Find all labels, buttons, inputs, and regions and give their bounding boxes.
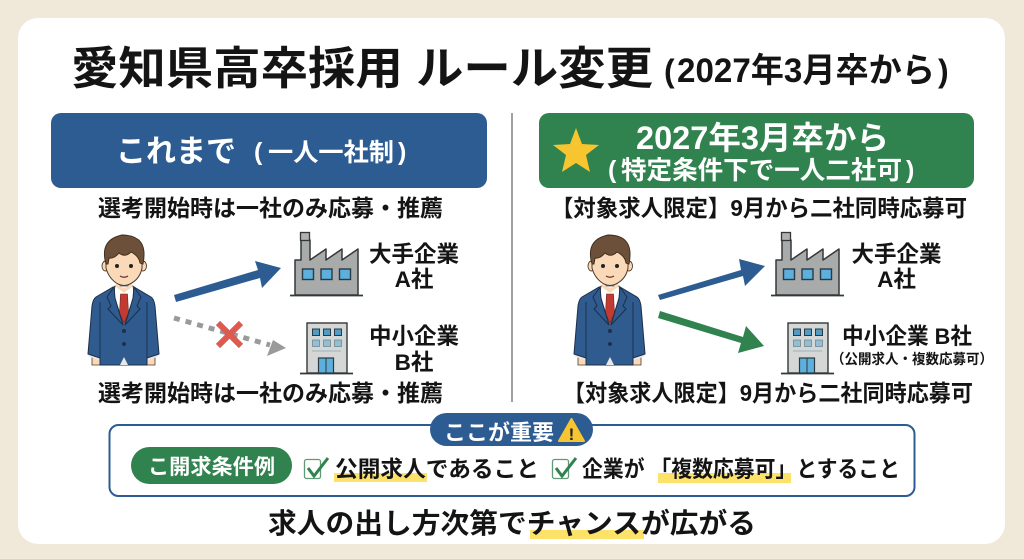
panel: left header: これまで	[116, 134, 236, 169]
icon: warning: !	[569, 425, 574, 444]
label: company B left: 中小企業	[369, 324, 459, 349]
title: 愛知県高卒採用 ルール変更	[71, 43, 653, 94]
icon: building right	[781, 323, 834, 374]
panel: conditions box	[110, 413, 914, 496]
badge: example conditions	[131, 447, 292, 484]
label: company A right: A社	[877, 267, 916, 292]
panel: left header: (	[254, 138, 263, 166]
badge: example conditions: こ開求条件例	[148, 456, 275, 479]
label: company B right: 中小企業 B社	[842, 324, 972, 349]
panel: right header	[539, 113, 974, 188]
panel: right header: 2027年3月卒から	[636, 120, 889, 156]
label: company B right	[831, 324, 993, 367]
left subheading: 選考開始時は一社のみ応募・推薦	[98, 195, 443, 221]
label: company B right: （公開求人・複数応募可）	[831, 351, 993, 367]
label: company A right	[851, 242, 942, 292]
panel: right header: )	[906, 156, 914, 184]
icon: check 1	[304, 458, 328, 478]
label: company B left: B社	[395, 350, 434, 375]
icon: building left	[300, 323, 353, 374]
arrow: dotted grey to company B	[174, 318, 286, 356]
icon: student left	[88, 235, 159, 365]
arrow: blue to company A	[658, 259, 765, 300]
label: company A left	[369, 242, 459, 292]
divider	[511, 113, 513, 402]
label: company B left	[369, 324, 459, 375]
title: 2027年3月卒から	[677, 52, 935, 90]
icon: factory left	[290, 232, 363, 296]
badge: important: ここが重要	[444, 420, 554, 445]
panel: right header: 特定条件下で一人二社可	[621, 157, 902, 185]
icon: warning	[559, 419, 584, 444]
arrow: green to company B	[658, 311, 764, 353]
panel: right header: (	[608, 156, 617, 184]
label: company A right: 大手企業	[851, 242, 942, 267]
condition 1: 公開求人であること	[335, 457, 539, 482]
title: )	[938, 53, 949, 89]
footer message: 求人の出し方次第でチャンスが広がる	[268, 507, 756, 539]
title: (	[664, 53, 675, 89]
icon: student right	[574, 235, 645, 365]
icon: factory right	[771, 232, 844, 296]
arrow: to company A	[174, 261, 281, 302]
label: company A left: A社	[395, 267, 434, 292]
panel: left header	[51, 113, 487, 188]
label: company A left: 大手企業	[369, 242, 459, 267]
icon: check 2	[552, 458, 576, 478]
badge: important	[430, 413, 593, 446]
icon: star	[553, 128, 599, 172]
title	[71, 43, 949, 94]
panel: left header: )	[398, 138, 406, 166]
icon: red cross	[218, 323, 241, 346]
right caption: 【対象求人限定】9月から二社同時応募可	[563, 380, 973, 406]
right subheading: 【対象求人限定】9月から二社同時応募可	[551, 195, 967, 221]
panel: left header: 一人一社制	[268, 139, 394, 167]
left caption: 選考開始時は一社のみ応募・推薦	[98, 380, 443, 406]
condition 2: 企業が 「複数応募可」とすること	[582, 456, 900, 482]
